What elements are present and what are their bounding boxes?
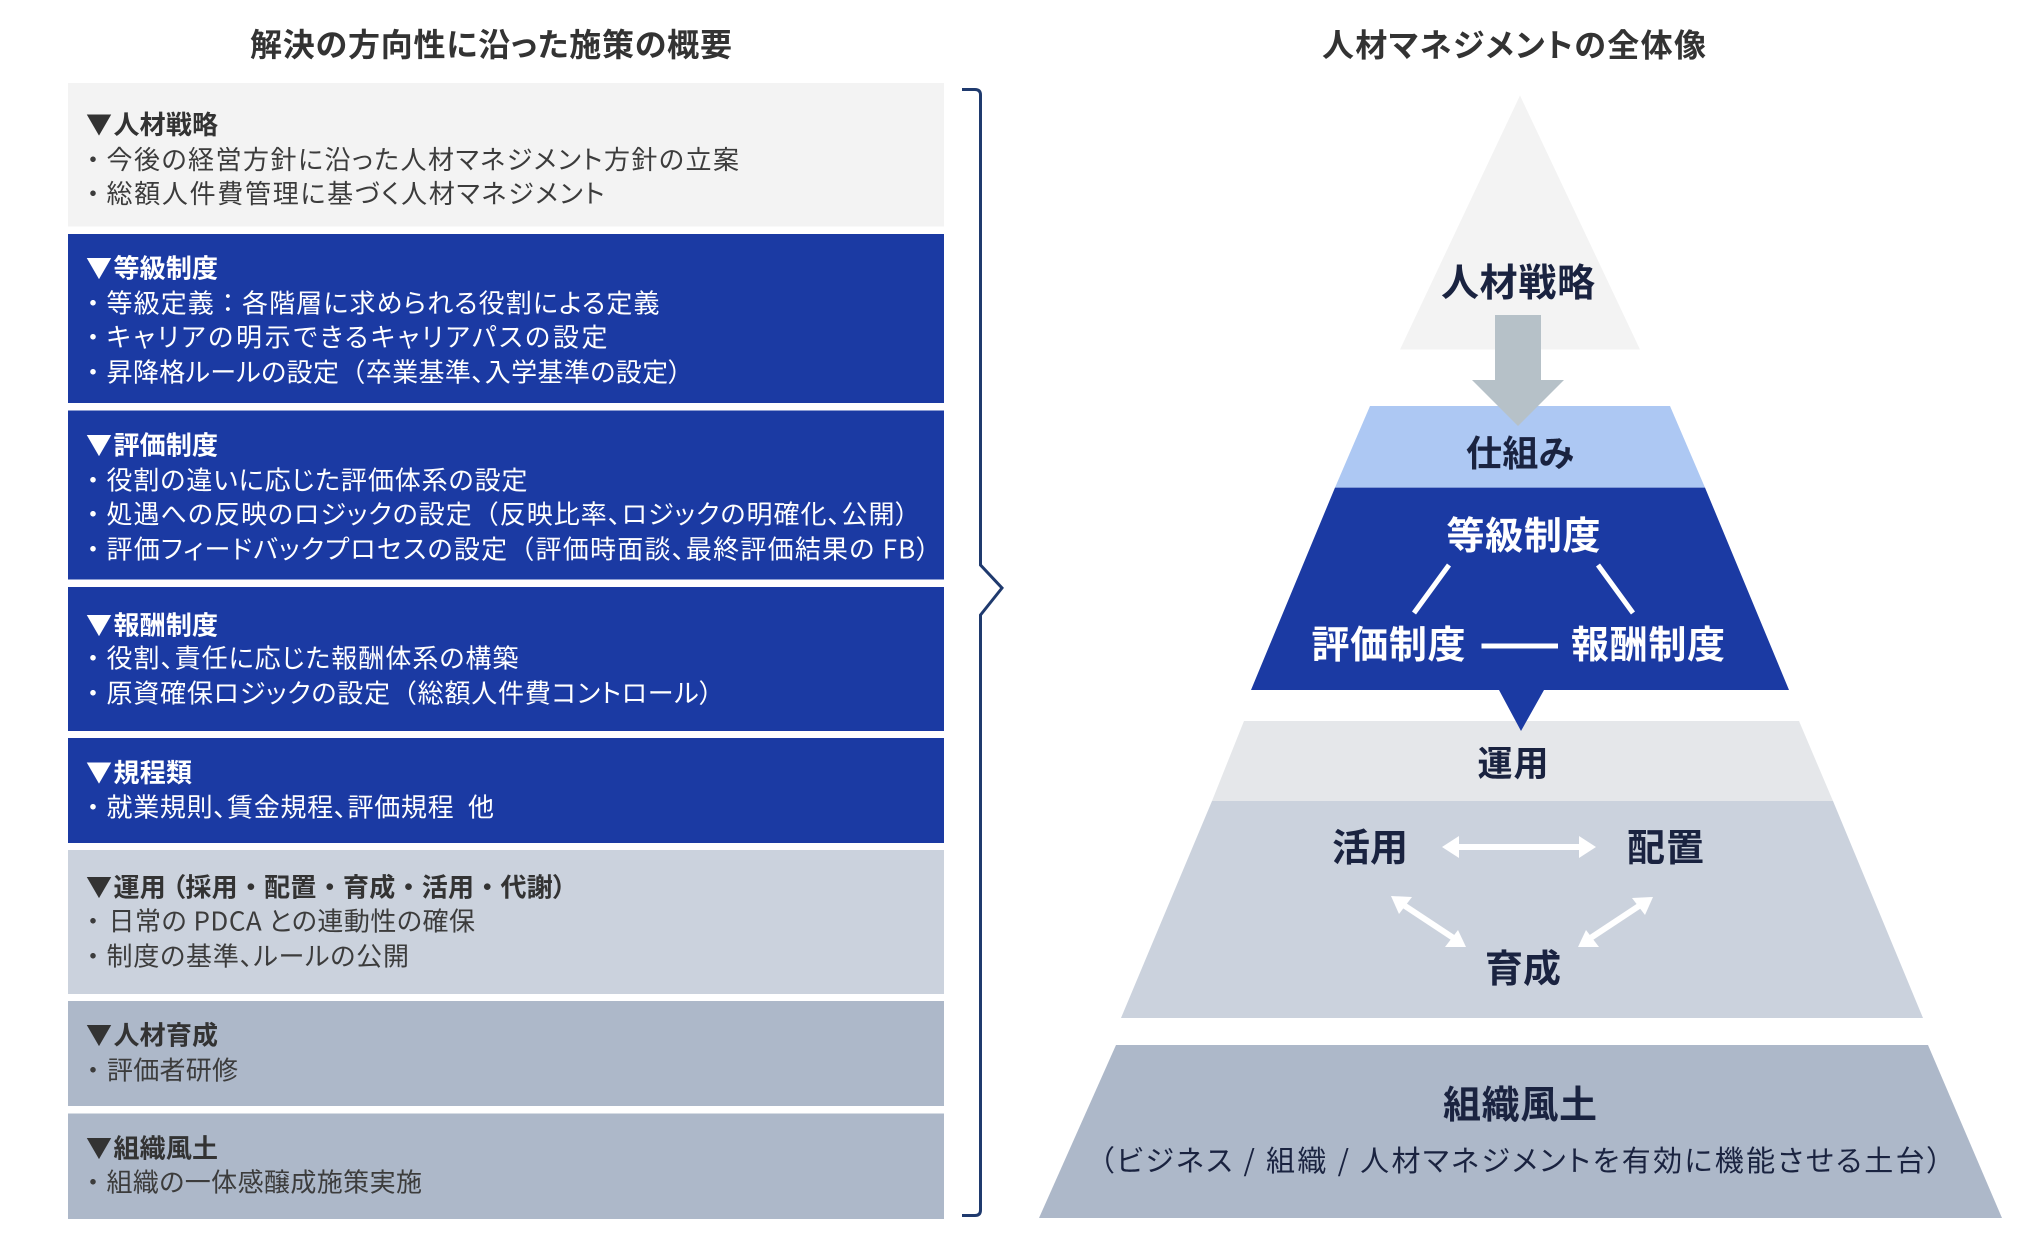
panel: 人材戦略: 今後の経営方針に沿った人材マネジメント方針の立案 [106, 140, 739, 177]
pyramid tier: 運用: 運用 [1478, 736, 1548, 787]
panel: 等級制度: ▼ [86, 248, 112, 286]
panel: 運用: 運用 （採用・配置・育成・活用・代謝） [114, 868, 566, 904]
pyramid tier: 運用 [1212, 721, 1833, 801]
label: 活用: 活用 [1332, 817, 1408, 872]
panel: 等級制度 [68, 234, 944, 403]
panel: 評価制度: ・ [80, 494, 106, 532]
panel: 運用: 制度の基準、ルールの公開 [106, 936, 409, 974]
pyramid tier: 仕組み: 仕組み [1466, 425, 1574, 477]
pyramid tier: 人材戦略 [1400, 96, 1640, 350]
panel: 規程類: 就業規則、賃金規程、評価規程 他 [106, 788, 494, 824]
heading: left column title: 解決の方向性に沿った施策の概要 [250, 20, 732, 66]
panel: 報酬制度: 役割、責任に応じた報酬体系の構築 [106, 638, 518, 676]
panel: 評価制度: 役割の違いに応じた評価体系の設定 [106, 460, 528, 498]
panel: 運用: 日常の PDCA との連動性の確保 [108, 902, 475, 938]
panel: 報酬制度: ・ [80, 674, 106, 710]
panel: 人材戦略: ▼ [86, 105, 112, 142]
panel: 評価制度: ▼ [86, 426, 112, 462]
panel: 人材育成 [68, 1001, 944, 1106]
panel: 等級制度: ・ [80, 318, 106, 354]
pyramid tier: 活用・配置・育成 [1121, 801, 1923, 1018]
panel: 組織風土: ▼ [86, 1128, 112, 1166]
panel: 運用: ・ [80, 902, 106, 938]
panel: 評価制度: 処遇への反映のロジックの設定（反映比率、ロジックの明確化、公開） [106, 494, 908, 532]
panel: 規程類: ▼ [86, 753, 112, 790]
panel: 規程類: ・ [80, 788, 106, 824]
panel: 組織風土: ・ [80, 1162, 106, 1200]
pyramid tier: 制度 [1251, 488, 1789, 731]
panel: 報酬制度: ・ [80, 638, 106, 676]
panel: 等級制度: 等級定義：各階層に求められる役割による定義 [106, 284, 660, 320]
panel: 報酬制度 [68, 587, 944, 731]
panel: 規程類: 規程類 [114, 753, 192, 790]
panel: 報酬制度: 原資確保ロジックの設定（総額人件費コントロール） [106, 674, 712, 710]
pyramid tier: 組織風土 [1039, 1045, 2002, 1218]
label: 評価制度: 評価制度 [1312, 614, 1466, 669]
panel: 評価制度: ・ [80, 530, 106, 566]
panel: 組織風土: 組織風土 [114, 1128, 218, 1166]
arrow: 配置 to 育成 [1578, 897, 1653, 947]
panel: 運用: ・ [80, 936, 106, 974]
panel: 等級制度: キャリアの明示できるキャリアパスの設定 [106, 318, 608, 354]
panel: 等級制度: 昇降格ルールの設定（卒業基準、入学基準の設定） [106, 352, 682, 390]
panel: 人材育成: ・ [80, 1050, 106, 1088]
panel: 人材戦略 [68, 83, 944, 226]
arrow: strategy down to mechanism [1472, 315, 1564, 426]
panel: 報酬制度: ▼ [86, 606, 112, 642]
connectors between systems [1414, 565, 1633, 646]
label: 等級制度: 等級制度 [1446, 505, 1600, 560]
arrow: 活用 to 育成 [1391, 896, 1466, 947]
panel: 運用: ▼ [86, 868, 112, 904]
panel: 評価制度: 評価制度 [114, 426, 218, 462]
panel: 報酬制度: 報酬制度 [114, 606, 218, 642]
panel: 組織風土: 組織の一体感醸成施策実施 [106, 1162, 422, 1200]
panel: 人材育成: 人材育成 [114, 1016, 218, 1052]
label: 組織風土: 組織風土 [1443, 1074, 1597, 1129]
label: 育成: 育成 [1485, 938, 1561, 993]
pyramid tier: 人材戦略: 人材戦略 [1441, 252, 1595, 307]
panel: 人材戦略: ・ [80, 174, 106, 211]
panel: 運用 [68, 850, 944, 994]
panel: 等級制度: ・ [80, 352, 106, 390]
arrow: 活用 to 配置 [1442, 836, 1596, 858]
panel: 組織風土 [68, 1114, 944, 1219]
label: 報酬制度: 報酬制度 [1571, 614, 1725, 669]
panel: 人材戦略: 総額人件費管理に基づく人材マネジメント [106, 174, 604, 211]
panel: 評価制度: 評価フィードバックプロセスの設定（評価時面談、最終評価結果の FB） [106, 530, 930, 566]
panel: 等級制度: 等級制度 [114, 248, 218, 286]
panel: 評価制度 [68, 410, 944, 580]
label: 配置: 配置 [1627, 817, 1704, 872]
panel: 評価制度: ・ [80, 460, 106, 498]
panel: 規程類 [68, 738, 944, 843]
panel: 人材戦略: 人材戦略 [114, 105, 218, 142]
panel: 人材育成: 評価者研修 [107, 1050, 238, 1088]
label: foundation note: （ビジネス / 組織 / 人材マネジメントを有効に機能させる土台） [1100, 1138, 1942, 1180]
bracket connecting panels to pyramid [962, 90, 1002, 1216]
panel: 人材育成: ▼ [86, 1016, 112, 1052]
heading: right column title: 人材マネジメントの全体像 [1322, 20, 1706, 66]
panel: 等級制度: ・ [80, 284, 106, 320]
pyramid tier: 仕組み [1335, 406, 1705, 488]
panel: 人材戦略: ・ [80, 140, 106, 177]
